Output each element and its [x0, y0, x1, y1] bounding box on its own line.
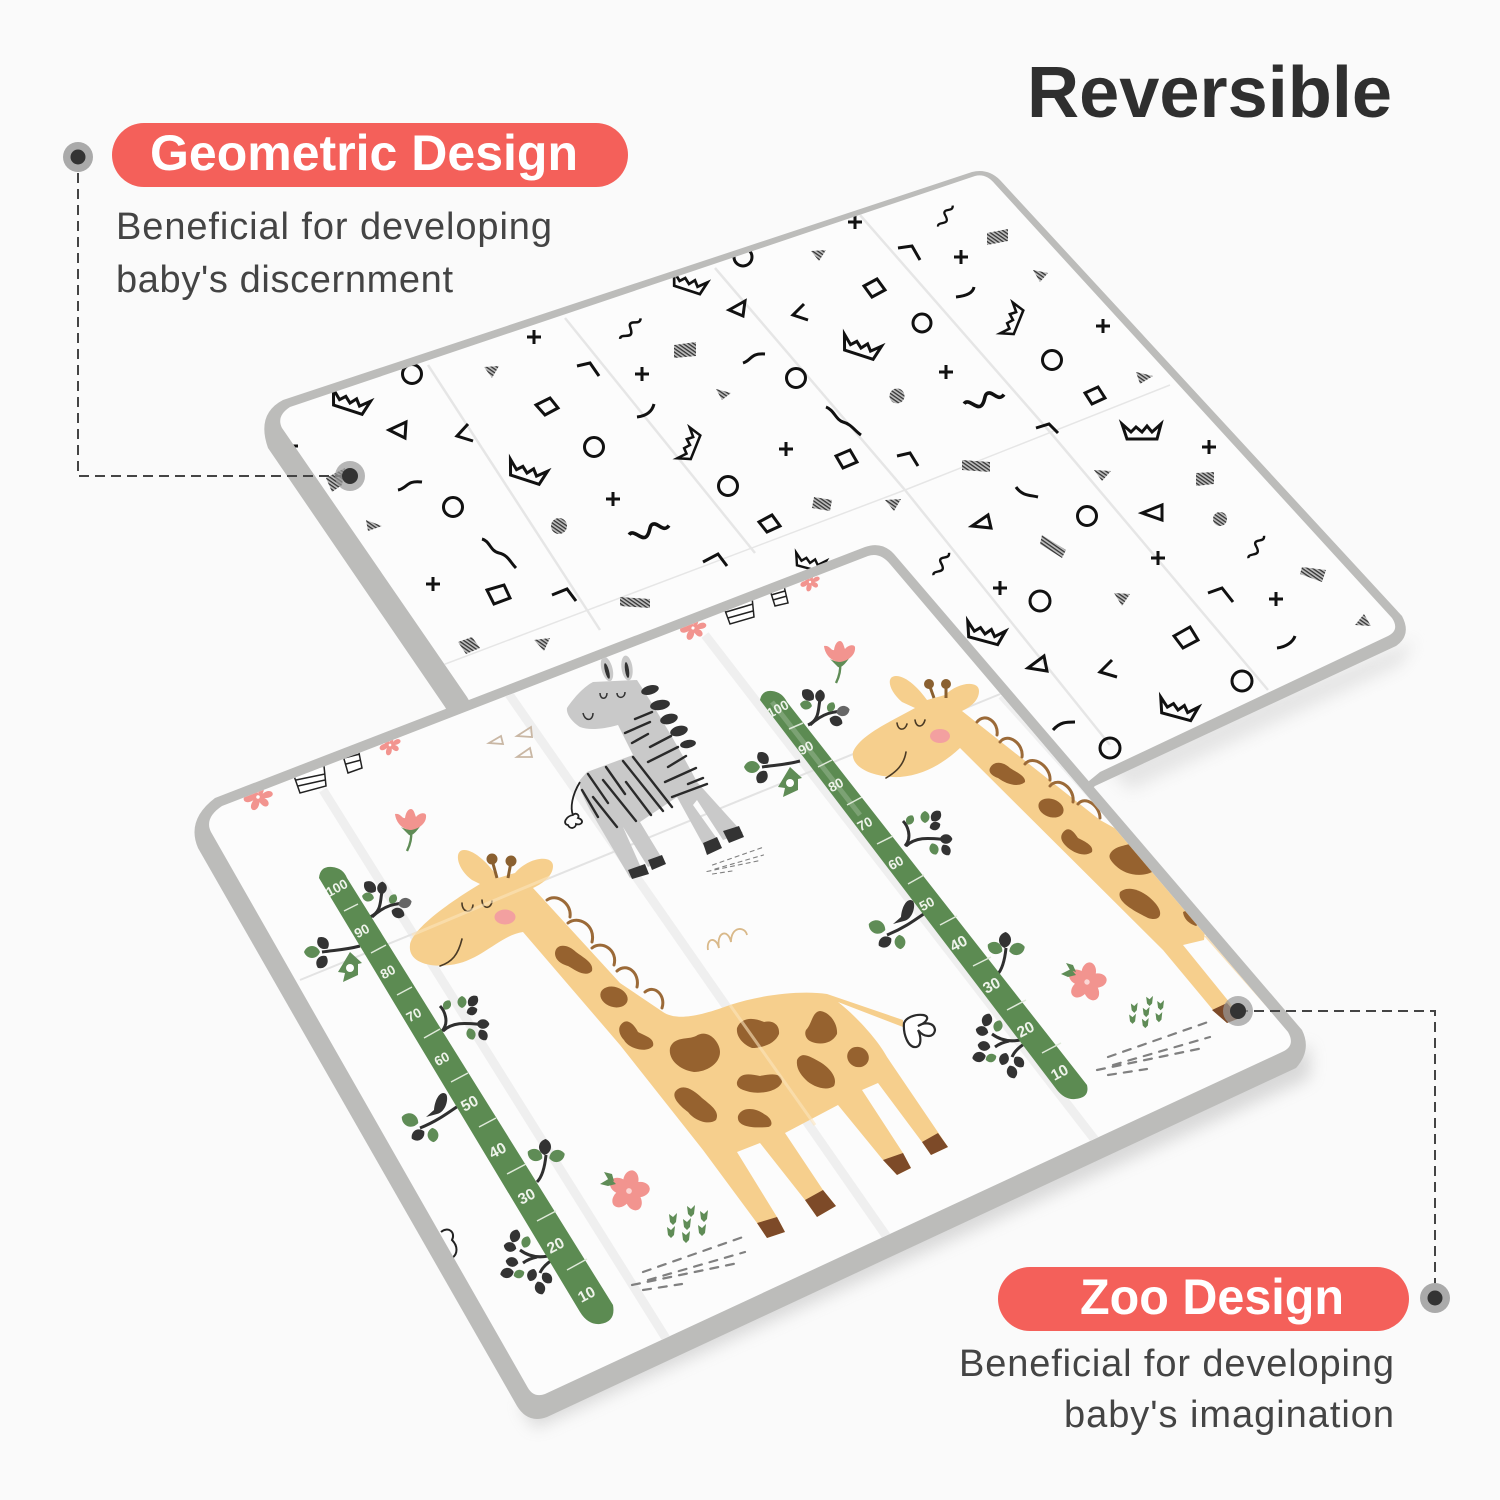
geometric design callout pill [112, 123, 628, 187]
zoo design description [959, 1343, 1394, 1436]
height ruler 1: 50 [458, 1092, 481, 1116]
grass dashes [632, 848, 1210, 1290]
hooves [757, 1133, 948, 1238]
height ruler 2 [760, 691, 1088, 1099]
tree branches, ruler 1 [304, 878, 566, 1296]
tail tuft [904, 1015, 935, 1047]
mat edge [264, 171, 1406, 1150]
height ruler 2: 20 [1014, 1018, 1037, 1042]
main giraffe [410, 850, 948, 1238]
partial edge mark [441, 1230, 456, 1258]
zebra [565, 655, 744, 879]
height ruler 2: 80 [826, 775, 846, 795]
geometric design description: baby's discernment [116, 259, 453, 301]
height ruler 2: 50 [917, 894, 937, 914]
height ruler 2: 70 [855, 814, 875, 834]
height ruler 1: 20 [544, 1234, 567, 1258]
green sprouts [667, 996, 1164, 1243]
height ruler 2: 10 [1048, 1061, 1071, 1085]
height ruler 2: 30 [980, 974, 1003, 998]
height ruler 1: 80 [378, 962, 398, 982]
height ruler 1: 90 [352, 921, 372, 941]
height ruler 1: 60 [432, 1049, 452, 1069]
fold highlights over giraffe [412, 877, 815, 1125]
mat surface [209, 555, 1291, 1395]
height ruler 2: 100 [764, 697, 791, 721]
face [440, 900, 492, 966]
pink flowers along top edge [242, 573, 820, 813]
tulips [395, 641, 855, 851]
height ruler 2: 90 [796, 738, 816, 758]
panel: geometric design mat (back) [264, 171, 1407, 788]
height ruler 1: 100 [323, 876, 350, 900]
geometric design description [116, 206, 552, 301]
leader line: geometric [63, 142, 365, 491]
ears [600, 656, 633, 681]
flowers lower [600, 959, 1111, 1216]
horns [488, 855, 515, 878]
title: Reversible [1027, 53, 1392, 133]
height ruler 2: 60 [886, 853, 906, 873]
height ruler 1: 40 [486, 1139, 509, 1163]
mane [547, 898, 663, 1008]
zoo design description: Beneficial for developing [959, 1343, 1394, 1385]
pill label: Geometric Design [150, 125, 578, 181]
mane tufts [640, 683, 697, 749]
height ruler 2: 40 [947, 932, 970, 956]
zoo design description: baby's imagination [1064, 1394, 1394, 1436]
height ruler 1: 30 [515, 1185, 538, 1209]
geometric design description: Beneficial for developing [116, 206, 552, 248]
height ruler 1: 10 [575, 1283, 598, 1307]
second ruler branches [744, 686, 1027, 1080]
mat surface [280, 175, 1395, 1100]
second giraffe [853, 676, 1272, 1023]
leader line: zoo [1223, 996, 1450, 1313]
stripes [582, 712, 707, 827]
mat edge [194, 545, 1306, 1419]
geometric pattern symbols [288, 204, 1371, 758]
height ruler 1 [319, 867, 613, 1324]
fold lines on back mat [428, 215, 1268, 745]
zebra tail [565, 782, 582, 828]
zoo design callout pill [998, 1267, 1409, 1331]
small triangles [489, 727, 532, 757]
baskets along top edge [293, 586, 788, 793]
sketch swirl [708, 929, 747, 950]
height ruler 1: 70 [404, 1005, 424, 1025]
fold bands on front mat [300, 632, 1104, 1340]
panel: zoo design mat (front) [194, 545, 1310, 1428]
pill label: Zoo Design [1080, 1269, 1344, 1325]
